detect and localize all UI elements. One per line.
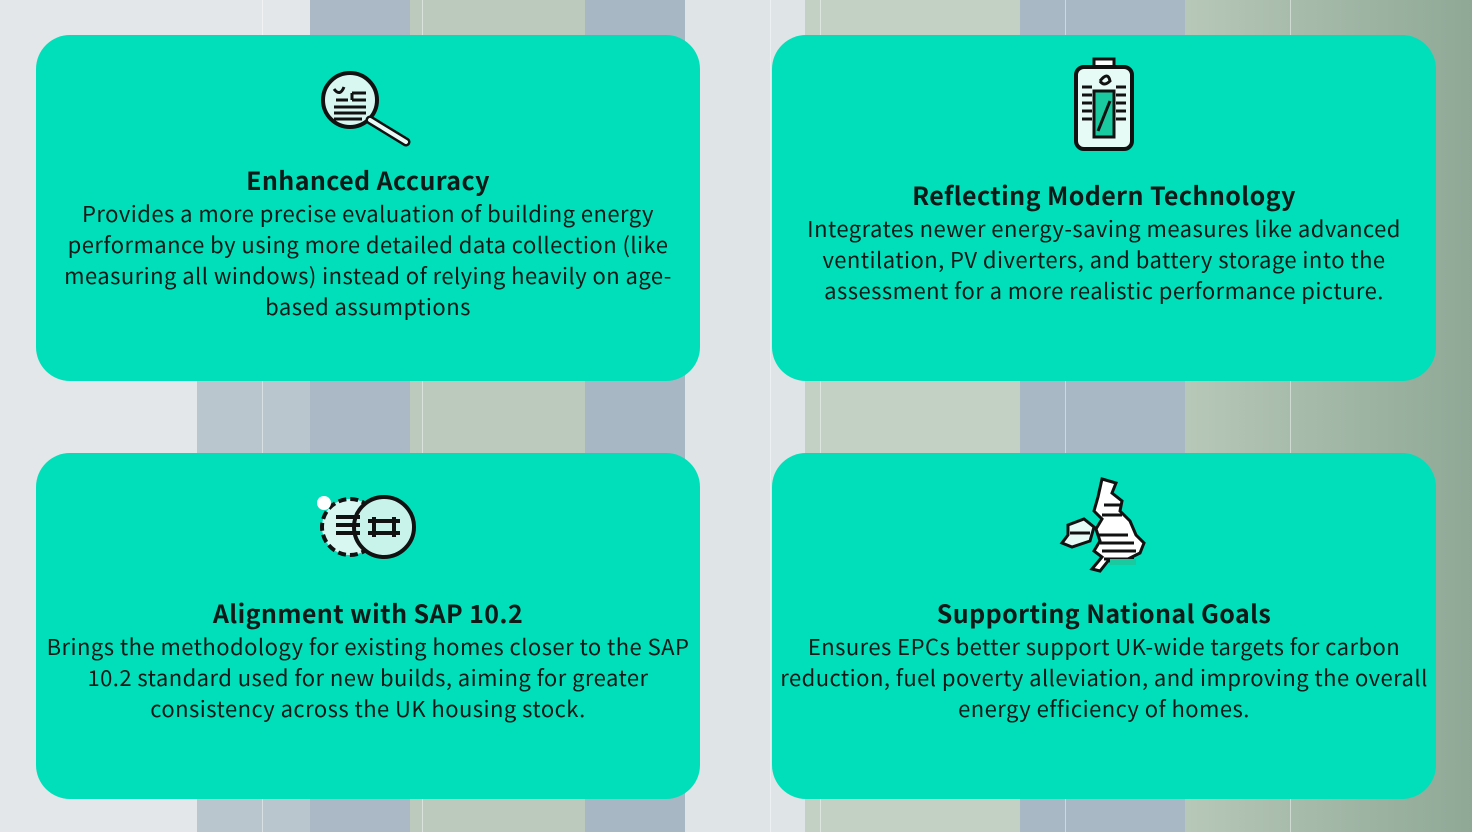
text: Enhanced Accuracy: Provides a more precise evaluation of building energy performance by using more detailed data collection (like measuring all windows) instead of relying heavily on age-based assumptions	[64, 197, 672, 322]
text: Supporting National Goals: Supporting National Goals	[937, 595, 1271, 631]
text: Alignment with SAP 10.2: Alignment with SAP 10.2	[213, 595, 523, 631]
icon: gear and arrows	[317, 495, 416, 559]
text: Enhanced Accuracy: Enhanced Accuracy	[246, 162, 490, 198]
card: Reflecting Modern Technology	[772, 35, 1436, 381]
icon: magnifier	[321, 71, 410, 146]
card: Supporting National Goals	[772, 453, 1436, 799]
icon: battery	[1074, 58, 1134, 151]
card: Alignment with SAP 10.2	[36, 453, 700, 799]
text: Alignment with SAP 10.2: Brings the methodology for existing homes closer to the SAP 10.2 standard used for new builds, aiming for greater consistency across the UK housing stock.	[47, 630, 689, 724]
text: Reflecting Modern Technology: Reflecting Modern Technology	[912, 177, 1296, 213]
icon: UK map	[1060, 477, 1146, 573]
text: Reflecting Modern Technology: Integrates newer energy-saving measures like advanced ventilation, PV diverters, and battery storage into the assessment for a more realistic performance picture.	[807, 212, 1401, 306]
card: Enhanced Accuracy	[36, 35, 700, 381]
text: Supporting National Goals: Ensures EPCs better support UK-wide targets for carbon reduction, fuel poverty alleviation, and improving the overall energy efficiency of homes.	[780, 630, 1428, 724]
